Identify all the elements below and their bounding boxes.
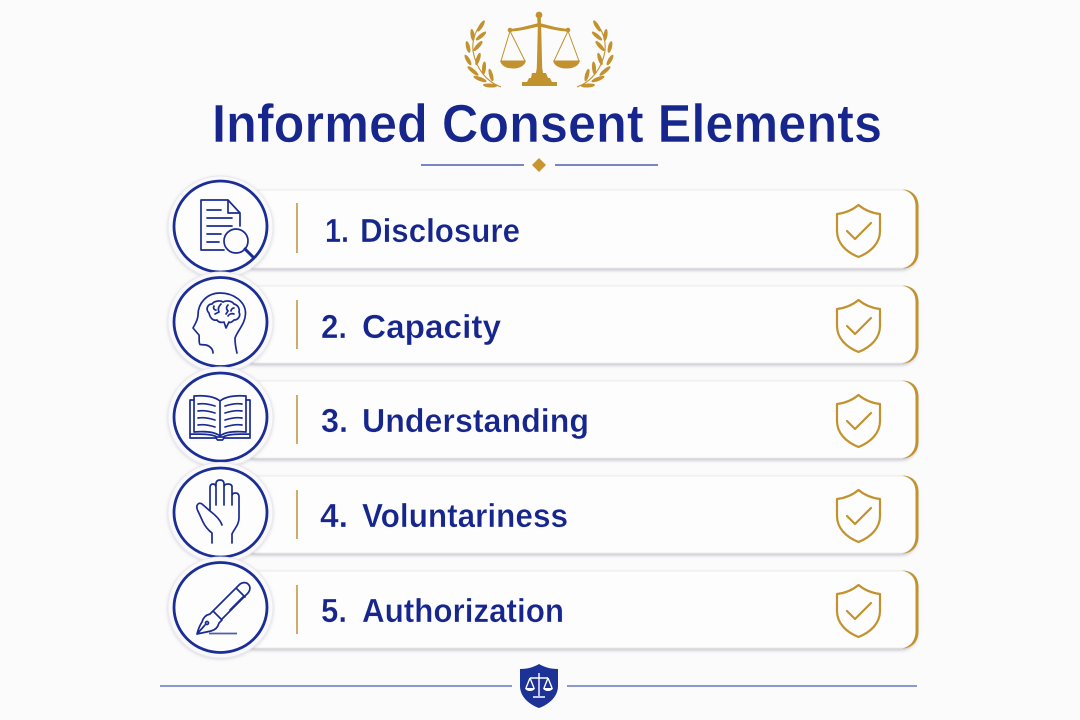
card 2 divider [296, 300, 298, 349]
card 2 label: Capacity [362, 308, 502, 345]
badge 1: document and magnifier [168, 176, 273, 278]
card 1 label: 1. [325, 212, 349, 249]
badge 2: head with brain [168, 272, 273, 372]
card 2 gold edge [902, 286, 918, 364]
icon: shield check 5 [837, 585, 880, 637]
card 3 label: Understanding [362, 402, 589, 439]
item 2: Capacity [240, 286, 918, 364]
card 3 label: 3. [321, 402, 348, 439]
title: Informed Consent Elements [212, 94, 882, 154]
item 4: Voluntariness [240, 476, 918, 554]
card 5 label: Authorization [362, 592, 564, 629]
badge 4: raised hand [168, 462, 273, 562]
card 4 [240, 476, 917, 553]
card 4 divider [296, 490, 298, 539]
card 1 divider [296, 203, 298, 253]
icon: shield check 4 [837, 490, 880, 542]
card 3 divider [296, 395, 298, 444]
card 1 label: Disclosure [360, 212, 520, 249]
badge 3: open book [168, 367, 273, 467]
item 5: Authorization [240, 570, 918, 648]
footer rule [160, 685, 917, 687]
card 5 label: 5. [321, 592, 347, 629]
footer shield emblem [520, 664, 558, 708]
icon: gold scales with laurel [463, 12, 615, 88]
icon: shield check 1 [837, 205, 880, 257]
card 4 gold edge [902, 476, 918, 554]
item 3: Understanding [240, 380, 918, 458]
card 4 label: Voluntariness [362, 497, 568, 534]
icon: shield check 2 [837, 300, 880, 352]
card 3 gold edge [902, 380, 918, 458]
card 5 [240, 571, 917, 648]
card 1 gold edge [902, 190, 918, 268]
card 1 [240, 190, 917, 268]
badge 5: fountain pen [168, 557, 273, 658]
card 2 label: 2. [321, 308, 347, 345]
title divider with diamond [421, 158, 658, 172]
card 5 gold edge [902, 570, 918, 648]
card 4 label: 4. [320, 497, 348, 534]
card 2 [240, 286, 917, 363]
item 1: Disclosure [240, 190, 918, 268]
card 5 divider [296, 585, 298, 634]
icon: shield check 3 [837, 395, 880, 447]
card 3 [240, 381, 917, 458]
